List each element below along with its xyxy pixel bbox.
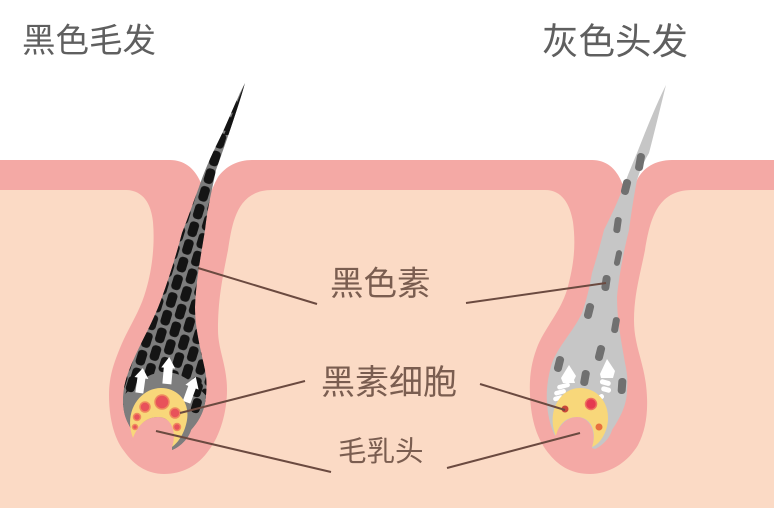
- label: dermal papilla: 毛乳头: [338, 436, 424, 468]
- icon: white arrow centre: [160, 356, 176, 385]
- icon: dashed white arrow left: [553, 365, 576, 402]
- icon: white arrow left: [132, 367, 150, 394]
- line: papilla left: [156, 431, 331, 472]
- line: melanin left: [198, 268, 317, 304]
- title: black hair: 黑色毛发: [22, 23, 156, 60]
- melanocyte dots: [132, 395, 180, 430]
- black hair: [123, 83, 245, 450]
- title: gray hair: 灰色头发: [542, 21, 688, 62]
- line: melanin right: [466, 283, 606, 303]
- line: papilla right: [447, 433, 580, 468]
- line: melanocyte left: [180, 381, 305, 413]
- papilla hump: [553, 417, 594, 455]
- melanocyte crescent: [130, 388, 187, 447]
- label: melanin: 黑色素: [330, 266, 430, 303]
- skin: middle peach dermis: [164, 190, 590, 508]
- skin: pink epidermis layer with follicles: [0, 160, 774, 508]
- leader lines: [156, 268, 606, 472]
- hair shaft: [547, 85, 666, 449]
- melanocyte dots: [586, 398, 596, 410]
- melanocyte crescent: [553, 388, 608, 447]
- icon: dashed white arrow right: [595, 359, 615, 402]
- hair shaft with pigment cells: [123, 83, 245, 450]
- gray hair: [547, 85, 666, 455]
- label: melanocyte: 黑素细胞: [321, 364, 457, 402]
- skin: right peach dermis: [590, 190, 774, 508]
- papilla hump: [131, 417, 174, 455]
- icon: white arrow right: [180, 374, 202, 405]
- skin: left peach dermis: [0, 190, 164, 508]
- pigment granules: [553, 152, 646, 394]
- line: melanocyte right: [480, 384, 565, 410]
